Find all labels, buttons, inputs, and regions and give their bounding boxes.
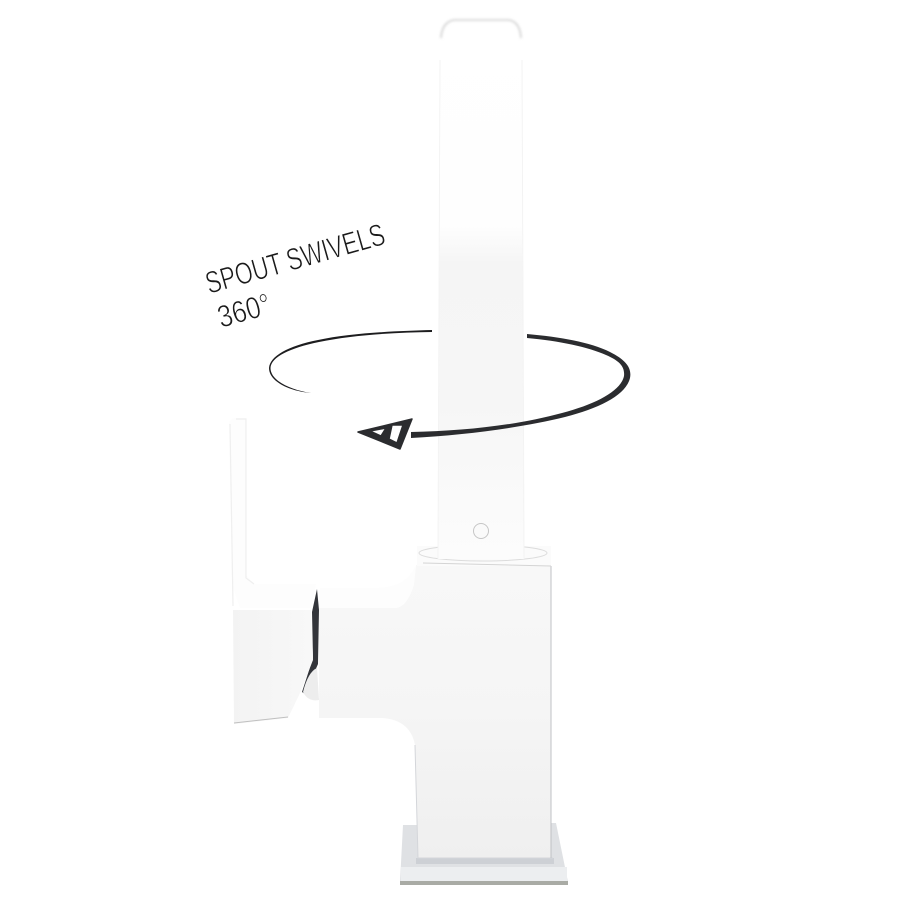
label: spout swivels 360: 360° [213,286,275,335]
spout pin [474,524,488,538]
valve knob [303,668,319,700]
base plate [400,823,568,885]
arrowhead [358,419,412,449]
tap body [319,565,551,858]
label: spout swivels 360 [201,217,389,335]
arrow front thick stroke [411,334,630,438]
spout [438,20,524,559]
neck top highlight [319,565,416,608]
lever handle [229,418,319,724]
collar [417,545,551,566]
tap illustration [229,20,568,885]
label: spout swivels 360: SPOUT SWIVELS [201,217,389,301]
body edge lines [415,745,553,858]
dark joint gap [302,589,319,694]
rotation arrow [269,330,630,449]
arrow rear thin stroke [269,330,432,393]
